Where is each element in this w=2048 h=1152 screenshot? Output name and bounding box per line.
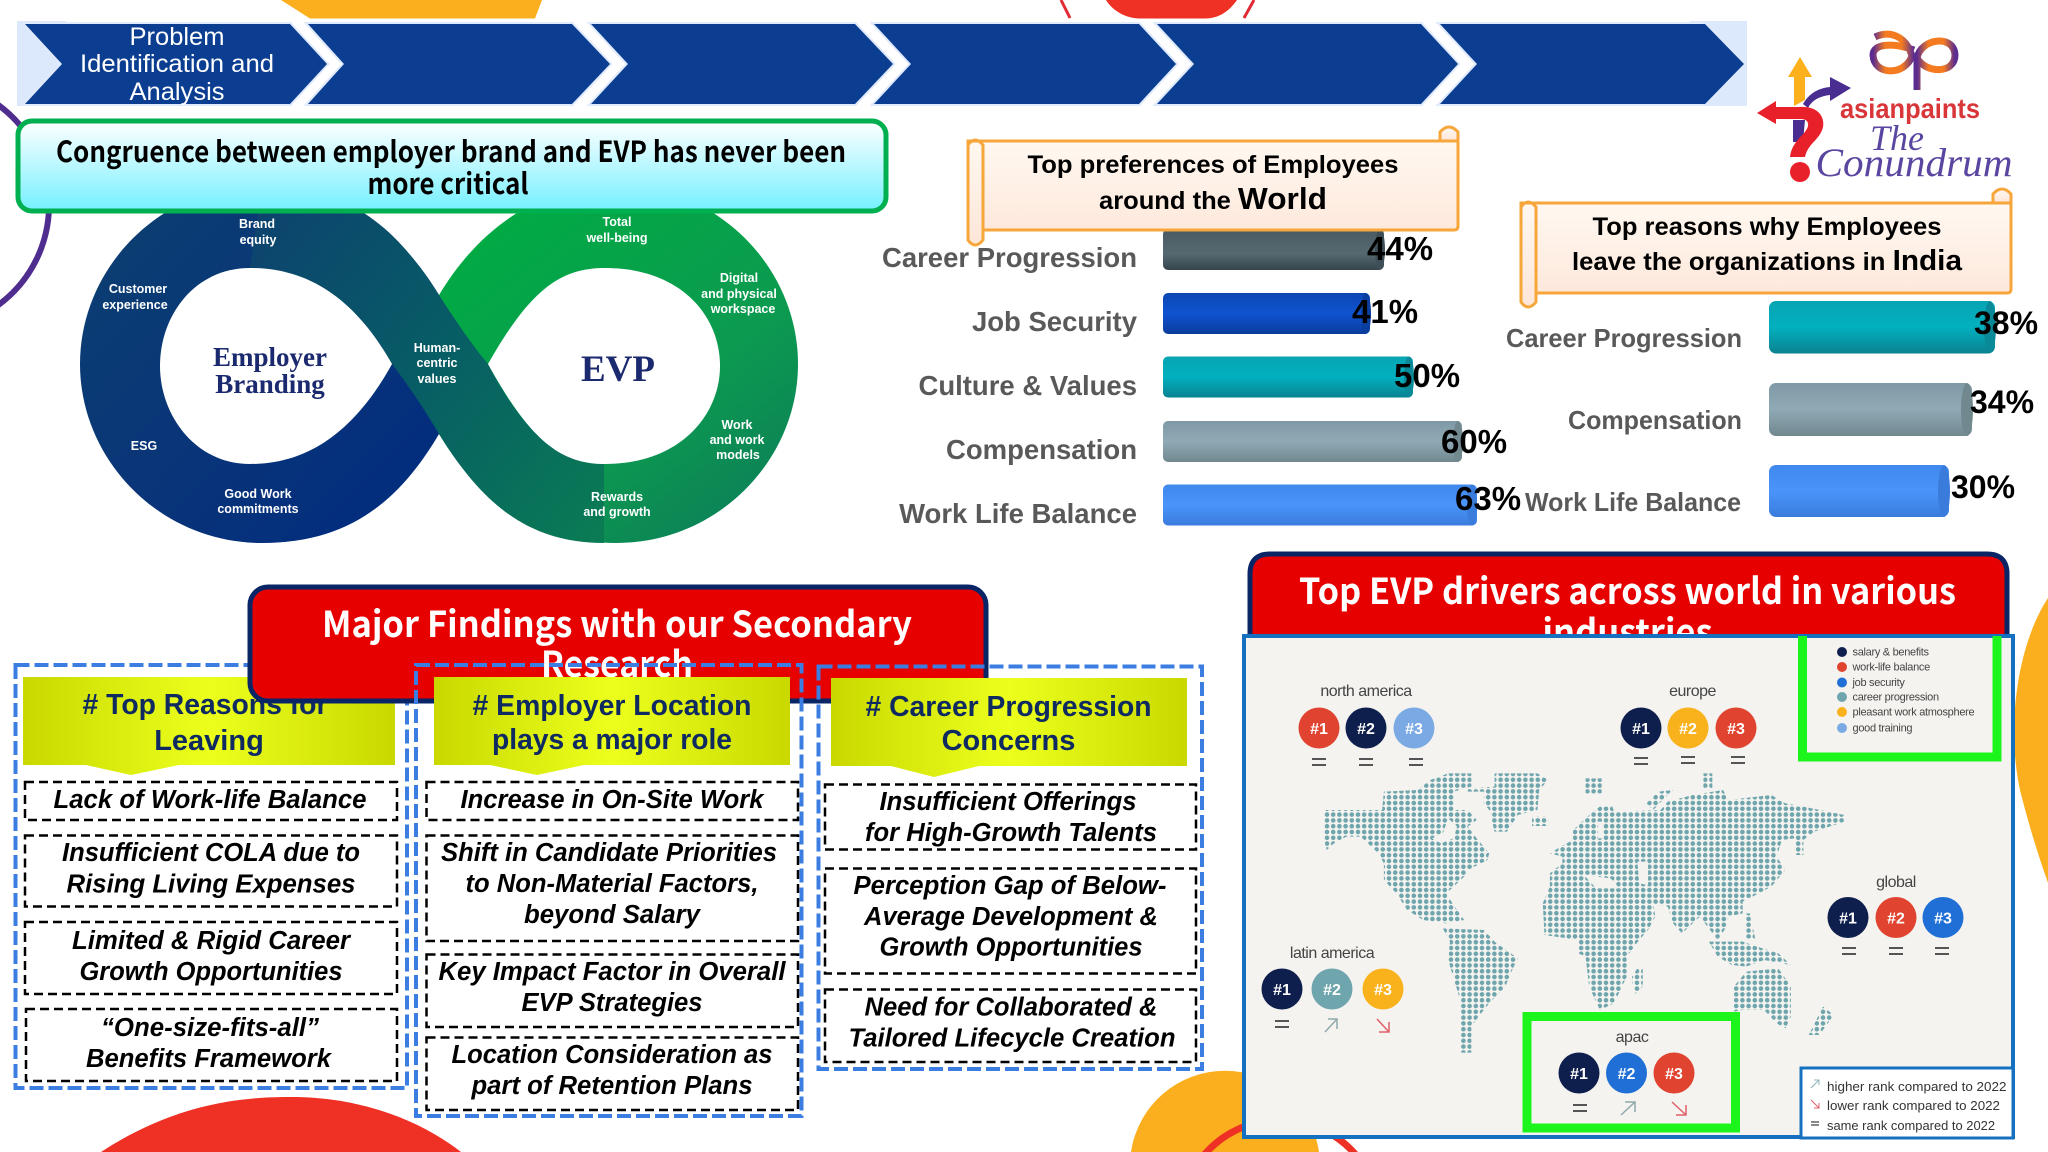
header: employer location: # Employer Location [472,690,752,722]
finding: key impact factor: Key Impact Factor in Overall [438,958,786,986]
key: rank change: same rank compared to 2022 [1827,1119,1995,1133]
logo: asianpaints the conundrum: asianpaints [1840,93,1980,124]
logo: asianpaints the conundrum [1757,34,2012,185]
chevron label [80,23,274,106]
infinity labels: and work [710,433,764,447]
infinity labels [102,215,777,519]
region: global: #1 [1839,910,1857,928]
infinity labels: Rewards [591,490,643,504]
bar: career progression 38% [1506,301,1996,354]
region: apac: #2 [1618,1066,1636,1083]
column: employer location [416,665,802,1116]
bar: career progression 44% [882,229,1385,273]
region: global: global [1876,874,1916,891]
legend of drivers [1802,636,1997,757]
infinity labels: Work [721,418,753,432]
heading: major findings [250,587,986,701]
finding: location consideration: part of Retention Plans [470,1072,752,1100]
region: apac: #3 [1665,1066,1683,1083]
region: apac: apac [1616,1029,1649,1046]
infinity labels: and growth [583,505,651,519]
header: employer location: plays a major role [492,724,732,756]
percent values: 44% [1367,230,1433,267]
finding: perception gap: Perception Gap of Below- [854,872,1166,900]
heading: top EVP drivers [1250,554,2007,660]
infinity labels: Customer [109,282,167,296]
percent values: 50% [1394,357,1460,394]
infinity labels: experience [102,298,168,312]
banner: top preferences [968,127,1458,245]
finding: on-site work [426,782,798,820]
bar: work life balance 63%: Work Life Balance [899,498,1137,529]
infinity labels: commitments [217,502,299,516]
dotted world map [1327,774,1845,1052]
region: latin america: #1 [1273,982,1291,999]
percent values: 34% [1970,384,2034,420]
legend of drivers: pleasant work atmosphere [1852,706,1974,718]
region: apac: #1 [1570,1066,1588,1083]
region: europe: #1 [1632,721,1650,738]
banner: top reasons India: leave the organizations in India [1572,245,1963,277]
heading: major findings: Research [541,636,693,688]
finding: location consideration [426,1038,798,1110]
column: top reasons for leaving [16,665,407,1088]
finding: tailored lifecycle [825,990,1196,1062]
header: career progression: # Career Progression [866,691,1152,723]
banner: top reasons India [1521,189,2011,307]
region: latin america: #3 [1374,982,1392,999]
finding: work-life balance: Lack of Work-life Balance [54,786,366,814]
infinity labels: Digital [720,271,758,285]
chevron label: Problem [130,23,224,51]
region: global: #2 [1887,910,1905,928]
banner: top reasons India: Top reasons why Employees [1592,213,1942,241]
heading: congruence callout: Congruence between employer brand and EVP has never been [56,129,846,171]
EVP label: EVP [581,349,655,390]
legend of drivers: work-life balance [1852,662,1930,674]
bar: work life balance 30%: Work Life Balance [1525,487,1741,517]
bar: culture and values 50% [918,356,1414,401]
infinity labels: and physical [701,287,777,301]
chevron label: Identification and [80,50,274,78]
region: europe: europe [1669,683,1717,700]
finding: rigid career growth: Limited & Rigid Career [72,927,352,955]
infinity labels: well-being [585,231,648,245]
legend of drivers: career progression [1852,692,1939,704]
region: europe: #2 [1679,721,1697,738]
chart: top preferences of employees around the world [882,229,1521,529]
finding: high-growth talents: Insufficient Offerings [880,788,1136,816]
header: top reasons for leaving: # Top Reasons for [82,689,328,721]
percent values: 41% [1352,293,1418,330]
percent values [1352,230,1521,517]
region: latin america: latin america [1290,945,1375,962]
banner: top preferences: around the World [1099,181,1327,216]
chevron label: Analysis [130,78,224,106]
infinity diagram: employer branding and EVP [80,185,798,543]
logo: asianpaints the conundrum: The [1870,118,1924,158]
region: europe: #3 [1727,721,1745,738]
finding: tailored lifecycle: Tailored Lifecycle Creation [848,1024,1176,1052]
finding: candidate priorities: beyond Salary [524,901,702,929]
finding: tailored lifecycle: Need for Collaborated & [864,994,1158,1022]
percent values: 38% [1974,305,2038,341]
key: rank change: lower rank compared to 2022 [1827,1099,2000,1113]
bar: job security 41%: Job Security [972,306,1138,337]
finding: rigid career growth [25,922,397,994]
banner: top preferences: Top preferences of Employees [1028,151,1398,179]
bar: work life balance 63% [899,484,1477,529]
heading: major findings: Major Findings with our Secondary [322,596,912,648]
legend of drivers: good training [1852,722,1912,734]
infinity labels: Human- [414,341,460,355]
bar: compensation 34% [1568,383,1973,436]
infinity labels: Brand [239,217,275,231]
finding: high-growth talents [825,784,1196,850]
region: north america: #3 [1405,721,1423,738]
region: europe [1620,683,1756,764]
process chevron band [17,21,1747,106]
bar: career progression 44%: Career Progression [882,242,1137,273]
region: north america: #2 [1357,721,1375,738]
region: global [1828,874,1964,954]
percent values: 30% [1951,469,2015,505]
finding: key impact factor: EVP Strategies [522,989,702,1017]
finding: candidate priorities [426,836,798,941]
bar: compensation 60%: Compensation [946,434,1137,465]
legend of drivers: job security [1852,677,1905,689]
region: apac [1527,1016,1736,1128]
logo: asianpaints the conundrum: Conundrum [1816,140,2012,185]
employer branding label [213,342,327,399]
finding: work-life balance [25,782,397,820]
finding: on-site work: Increase in On-Site Work [460,786,765,814]
finding: candidate priorities: to Non-Material Factors, [466,870,758,898]
bar: work life balance 30% [1525,465,1950,517]
region: north america [1298,683,1434,765]
infinity labels: values [418,372,457,386]
finding: perception gap: Growth Opportunities [880,934,1142,962]
finding: perception gap: Average Development & [863,903,1158,931]
key: rank change [1801,1068,2013,1138]
finding: COLA [25,836,397,906]
region: north america: #1 [1310,721,1328,738]
bar: compensation 60% [946,421,1463,465]
header: employer location [434,677,790,775]
infinity labels: Good Work [224,487,292,501]
heading: top EVP drivers: Top EVP drivers across world in various [1299,563,1956,615]
infinity labels: workspace [710,302,775,316]
region: latin america [1262,945,1404,1032]
finding: one-size-fits-all: “One-size-fits-all” [101,1014,319,1042]
finding: rigid career growth: Growth Opportunities [80,958,342,986]
finding: one-size-fits-all: Benefits Framework [86,1045,333,1073]
employer branding label: Employer [213,342,327,372]
bar: culture and values 50%: Culture & Values [918,370,1137,401]
column: career progression concerns [818,666,1202,1069]
percent values: 63% [1455,480,1521,517]
region: global: #3 [1934,910,1952,928]
finding: one-size-fits-all [26,1009,397,1081]
infinity labels: models [716,448,760,462]
infinity labels: ESG [131,439,157,453]
finding: COLA: Insufficient COLA due to [62,839,360,867]
infinity labels: centric [416,356,458,370]
finding: location consideration: Location Consideration as [452,1041,772,1069]
finding: high-growth talents: for High-Growth Talents [865,819,1157,847]
legend of drivers: salary & benefits [1852,646,1930,658]
heading: congruence callout [18,121,886,211]
bar: compensation 34%: Compensation [1568,405,1742,435]
region: latin america: #2 [1323,982,1341,999]
finding: candidate priorities: Shift in Candidate Priorities [441,839,777,867]
key: rank change: higher rank compared to 2022 [1827,1080,2007,1094]
bar: job security 41% [972,293,1371,337]
header: top reasons for leaving: Leaving [154,725,264,757]
bar: career progression 38%: Career Progression [1506,323,1742,353]
heading: top EVP drivers: industries [1542,604,1712,656]
chart: top reasons employees leave in India [1506,301,2038,517]
percent values [1951,305,2038,505]
infinity labels: Total [603,215,631,229]
infinity labels: equity [240,233,276,247]
panel: world map of EVP drivers [1244,636,2013,1138]
header: career progression [831,678,1187,777]
header: top reasons for leaving [23,677,395,775]
heading: congruence callout: more critical [368,161,528,203]
header: career progression: Concerns [942,725,1075,757]
finding: perception gap [825,868,1196,974]
percent values: 60% [1441,423,1507,460]
employer branding label: Branding [215,369,325,399]
finding: COLA: Rising Living Expenses [66,870,356,898]
finding: key impact factor [426,954,798,1027]
region: north america: north america [1320,683,1412,700]
